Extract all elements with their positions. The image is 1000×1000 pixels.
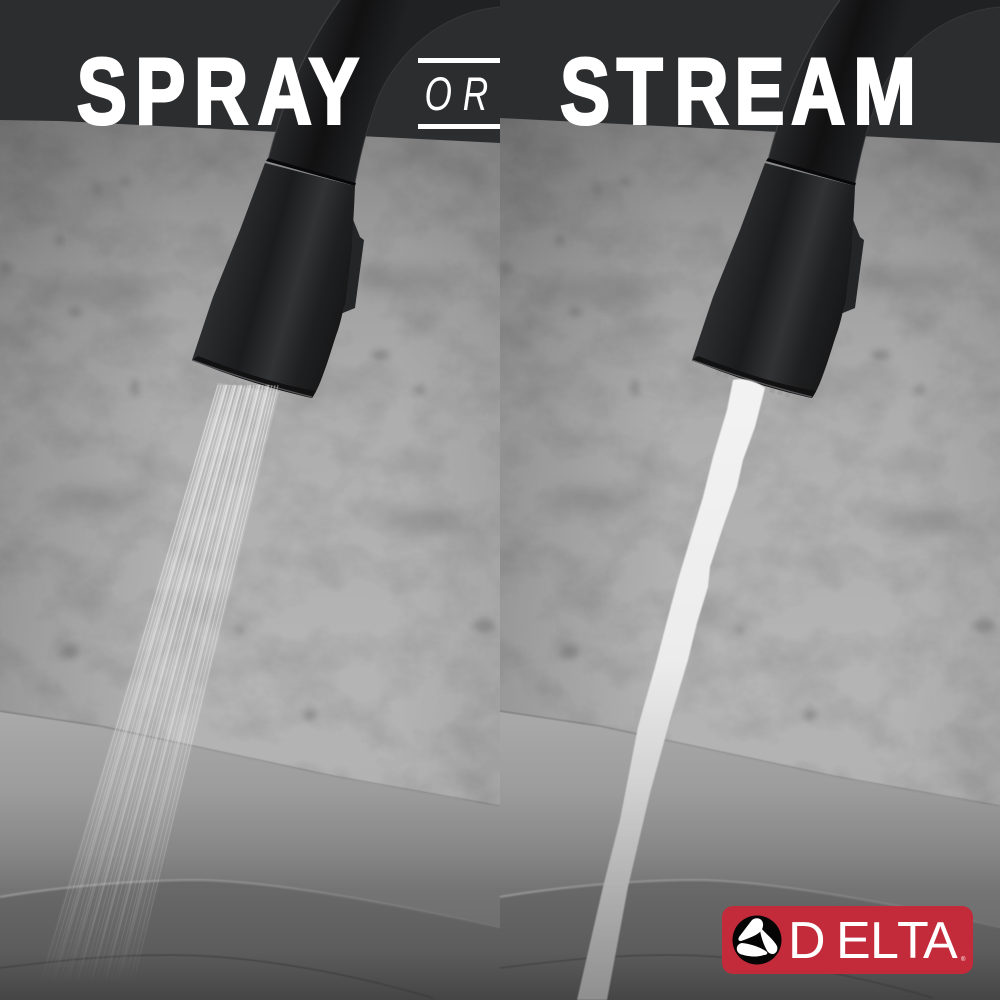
dark wall band: stream side [500, 0, 1000, 143]
dark wall band: spray side [0, 0, 500, 143]
faucet: spray side [192, 0, 500, 398]
stream water [577, 379, 765, 1000]
logo: Delta: DELTA [788, 912, 958, 970]
icon: Delta trilobe [732, 916, 782, 964]
divider: OR [418, 58, 500, 129]
spray water [38, 383, 279, 985]
stream nozzle highlights [716, 372, 792, 396]
spray nozzle highlights [218, 376, 280, 396]
faucet: stream side [692, 0, 1000, 398]
divider: OR: OR [424, 67, 488, 120]
panel: spray background [0, 0, 500, 1000]
logo: Delta [722, 906, 973, 974]
logo: Delta: ® [961, 956, 966, 963]
heading: STREAM: STREAM [560, 40, 916, 144]
panel: stream background [498, 0, 1000, 1000]
heading: SPRAY: SPRAY [77, 40, 359, 144]
